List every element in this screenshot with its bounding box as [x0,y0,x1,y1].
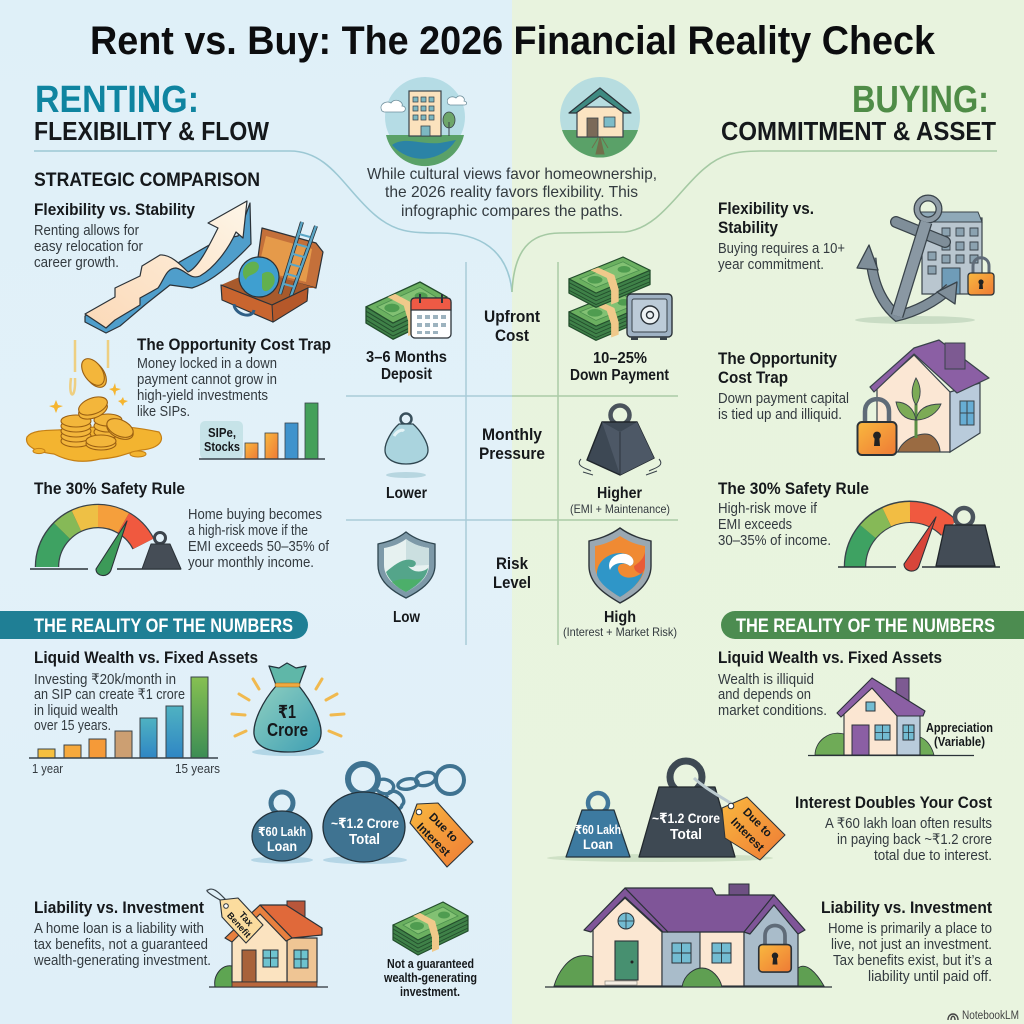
text: flexibility vs stability renting [34,200,195,271]
label: monthly pressure: Monthly [482,425,542,444]
text: interest doubles your cost: Interest Doubles Your Cost [795,793,992,812]
background: buying side [512,0,1024,1024]
text: opportunity cost trap renting: like SIPs. [137,404,190,420]
icon: money bag with 1 crore [232,663,344,756]
icon: tax benefit tag: Tax [236,910,255,929]
text: upfront buying: Down Payment [570,367,670,384]
text: liability vs investment buying: Home is primarily a place to [828,921,992,937]
icon: due to interest tag renting: Interest [414,821,452,859]
icon: 60 lakh loan weight buying: ₹60 Lakh [575,823,621,837]
chart: SIP growth bars: 1 year [32,761,64,776]
label: appreciation variable: (Variable) [934,735,985,749]
text: not a guaranteed: wealth-generating [383,971,477,985]
text: liquid wealth buying: and depends on [718,687,811,703]
icon: money stack bottom [393,902,468,955]
label: risk level: Level [493,573,531,592]
text: high [563,609,677,639]
text: liquid wealth buying [718,648,942,719]
text: 30 percent rule renting body [188,507,330,571]
text: interest doubles your cost [795,793,992,864]
text: opportunity cost trap renting: Money locked in a down [137,356,277,372]
text: flexibility vs stability renting: easy relocation for [34,239,143,255]
text: opportunity cost trap buying: The Opportunity [718,349,837,368]
text: higher: Higher [597,485,642,502]
text: liability vs investment buying [821,898,993,985]
text: flexibility vs stability renting: career growth. [34,255,119,271]
text: 30 percent rule renting body: Home buying becomes [188,507,322,523]
icon: money bag with 1 crore: Crore [267,720,308,740]
text: liability vs investment renting: wealth-generating investment. [33,953,211,969]
text: opportunity cost trap buying [718,349,849,423]
curve divider buying [512,151,997,292]
icon: due to interest tag buying: Due to [740,806,774,840]
heading: strategic comparison: STRATEGIC COMPARISON [34,170,260,191]
text: liability vs investment buying: liability until paid off. [868,969,992,985]
icon: low risk shield [378,532,435,598]
banner: renting numbers [0,611,308,639]
text: liquid wealth renting: over 15 years. [34,718,111,734]
gauge: renting [30,516,181,576]
text: high: High [604,609,636,626]
text: opportunity cost trap buying: is tied up and illiquid. [718,407,842,423]
text: higher [570,485,670,516]
text: 30 percent rule renting body: your monthly income. [188,555,314,571]
chart: SIPs stocks bars: SIPe, [208,426,236,440]
label: monthly pressure: Pressure [479,444,545,463]
text: liquid wealth buying: Liquid Wealth vs. Fixed Assets [718,648,942,667]
label: upfront cost: Upfront [484,307,540,326]
icon: light weight [385,414,428,478]
gauge: buying [838,508,1000,571]
icon: 60 lakh loan weight renting [251,792,313,864]
chart: SIP growth bars [29,677,220,776]
icon: rising stairs arrow [85,201,251,333]
text: flexibility vs stability buying: Stability [718,218,778,237]
text: liquid wealth renting [34,648,258,734]
intro text block: infographic compares the paths. [401,203,623,220]
icon: 1.2 crore weight with chain renting: Total [349,832,380,848]
icon: small purple house [808,678,974,756]
text: opportunity cost trap renting: high-yield investments [137,388,268,404]
text: interest doubles your cost: total due to interest. [874,848,992,864]
intro text block [367,166,657,220]
text: liability vs investment renting: tax benefits, not a guaranteed [34,937,208,953]
text: opportunity cost trap renting [137,335,331,420]
panel: buying header [721,79,996,146]
text: liability vs investment renting: A home loan is a liability with [34,921,204,937]
banner: renting numbers: THE REALITY OF THE NUMBERS [34,616,293,637]
icon: tax benefit tag [207,889,263,943]
icon: due to interest tag buying: Interest [728,816,766,854]
text: opportunity cost trap renting: The Opportunity Cost Trap [137,335,331,354]
text: low: Low [393,609,420,626]
icon: heavy weight [579,406,661,475]
label: upfront cost: Cost [495,326,529,345]
icon: house with orange roof [209,901,328,987]
icon: house in circle [560,77,640,158]
text: liquid wealth buying: market conditions. [718,703,827,719]
text: upfront buying [570,350,670,384]
text: flexibility vs stability buying [718,199,845,273]
icon: 1.2 crore weight buying: ~₹1.2 Crore [652,810,720,826]
panel: renting header [34,79,269,146]
icon: 60 lakh loan weight renting: Loan [267,839,297,854]
chart: SIPs stocks bars: Stocks [204,440,240,454]
icon: large purple house with lock [545,884,832,987]
icon: money with safe [569,257,672,340]
intro text block: While cultural views favor homeownership, [367,166,657,183]
icon: 1.2 crore weight with chain renting: ~₹1.2 Crore [331,815,399,831]
text: 30 percent rule buying: EMI exceeds [718,517,792,533]
chart: SIP growth bars: 15 years [175,761,220,776]
icon: 1.2 crore weight buying: Total [670,827,702,843]
text: liability vs investment buying: Liability vs. Investment [821,898,992,917]
text: liquid wealth renting: an SIP can create ₹1 crore [34,687,185,703]
icon: due to interest tag buying [694,778,785,860]
text: flexibility vs stability buying: year commitment. [718,257,824,273]
text: flexibility vs stability buying: Flexibility vs. [718,199,814,218]
text: not a guaranteed: Not a guaranteed [387,957,474,971]
icon: tax benefit tag: Benefit [225,910,253,940]
icon: 60 lakh loan weight renting: ₹60 Lakh [258,825,306,839]
icon: suitcase with globe and ladder [221,222,323,322]
text: liquid wealth renting: Investing ₹20k/month in [34,672,176,688]
icon: due to interest tag renting: Due to [426,811,460,845]
text: liability vs investment renting [33,898,211,969]
text: opportunity cost trap renting: payment cannot grow in [137,372,277,388]
background: renting side [0,0,512,1024]
icon: 1.2 crore weight with chain renting [323,764,464,864]
icon: due to interest tag renting [410,803,473,867]
text: liability vs investment buying: Tax benefits exist, but it’s a [833,953,993,969]
label: monthly pressure [479,425,545,463]
text: higher: (EMI + Maintenance) [570,502,670,516]
text: 30 percent rule renting heading: The 30% Safety Rule [34,479,185,498]
panel: renting header: RENTING: [35,79,199,121]
text: opportunity cost trap buying: Down payment capital [718,391,849,407]
text: interest doubles your cost: A ₹60 lakh loan often results [825,816,992,832]
label: upfront cost [484,307,540,345]
text: liability vs investment renting: Liability vs. Investment [34,898,204,917]
text: liquid wealth renting: in liquid wealth [34,703,118,719]
text: flexibility vs stability buying: Buying requires a 10+ [718,241,845,257]
label: appreciation variable: Appreciation [926,721,993,735]
text: 30 percent rule buying: The 30% Safety Rule [718,479,869,498]
icon: melting coins [27,340,161,461]
icon: 60 lakh loan weight buying [547,793,773,862]
text: opportunity cost trap buying: Cost Trap [718,368,788,387]
panel: renting header: FLEXIBILITY & FLOW [34,116,269,146]
text: flexibility vs stability renting: Flexibility vs. Stability [34,200,195,219]
icon: 60 lakh loan weight buying: Loan [583,837,613,852]
text: liability vs investment buying: live, not just an investment. [831,937,992,953]
text: interest doubles your cost: in paying back ~₹1.2 crore [837,832,992,848]
curve divider renting [34,151,512,292]
text: liquid wealth renting: Liquid Wealth vs. Fixed Assets [34,648,258,667]
label: risk level: Risk [496,554,528,573]
text: upfront renting: 3–6 Months [366,349,447,366]
text: 30 percent rule buying [718,479,869,549]
icon: money with calendar [366,282,451,339]
text: 30 percent rule buying: High-risk move if [718,501,818,517]
text: upfront renting: Deposit [381,366,433,383]
label: risk level [493,554,531,592]
text: flexibility vs stability renting: Renting allows for [34,223,139,239]
text: high: (Interest + Market Risk) [563,625,677,639]
label: appreciation variable [926,721,993,749]
text: upfront renting [366,349,447,383]
icon: house with plant and lock [858,340,989,455]
icon: 1.2 crore weight buying [639,761,735,857]
panel: buying header: BUYING: [852,79,989,121]
text: liquid wealth buying: Wealth is illiquid [718,672,814,688]
icon: anchor with building and lock [855,198,994,324]
title: Rent vs. Buy: The 2026 Financial Reality Check [90,19,936,63]
text: upfront buying: 10–25% [593,350,647,367]
text: 30 percent rule renting body: EMI exceeds 50–35% of [188,539,330,555]
icon: apartment building in circle [381,77,467,166]
text: 30 percent rule renting body: a high-risk move if the [188,523,308,539]
comparison table grid left [346,262,512,645]
text: not a guaranteed: investment. [400,985,460,999]
intro text block: the 2026 reality favors flexibility. This [385,184,638,201]
chart: SIPs stocks bars [199,403,325,459]
panel: buying header: COMMITMENT & ASSET [721,116,996,146]
comparison table grid right [512,262,678,645]
icon: high risk shield [589,528,651,603]
text: not a guaranteed [383,957,477,999]
icon: money bag with 1 crore: ₹1 [278,702,296,722]
text: lower: Lower [386,485,427,502]
text: 30 percent rule buying: 30–35% of income. [718,533,831,549]
